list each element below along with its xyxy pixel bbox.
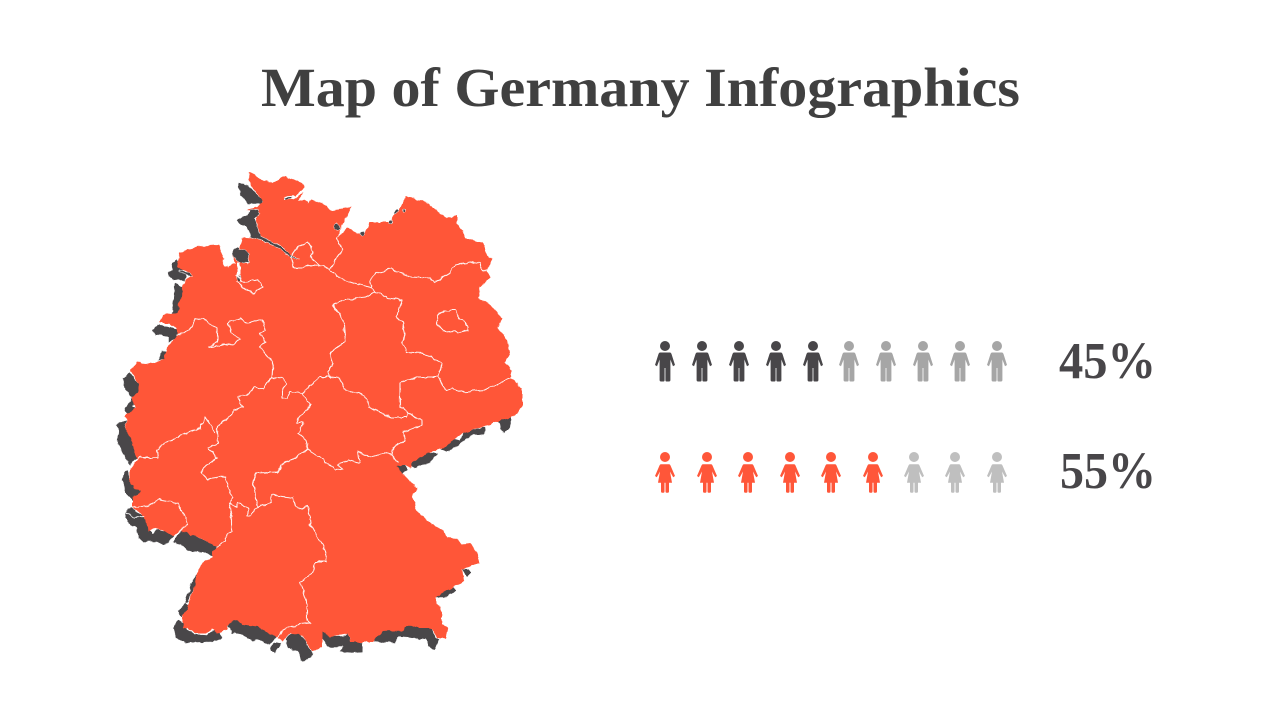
map of Germany — [115, 172, 522, 663]
red land mass — [125, 172, 522, 652]
state borders — [127, 238, 510, 640]
filled women: 55 percent — [655, 452, 883, 493]
bay and coastal cut-outs — [222, 258, 240, 275]
estuary and inland water shapes — [179, 197, 406, 282]
grey men: remainder — [839, 341, 1007, 382]
filled men: 45 percent — [655, 341, 823, 382]
grey women: remainder — [904, 452, 1007, 493]
male percentage: 45% — [1059, 333, 1156, 390]
female percentage: 55% — [1060, 443, 1156, 500]
male pictogram row — [655, 341, 1007, 382]
female pictogram row — [655, 452, 1007, 493]
title: Map of Germany Infographics — [261, 57, 1020, 118]
neighbouring land shapes — [115, 183, 511, 663]
